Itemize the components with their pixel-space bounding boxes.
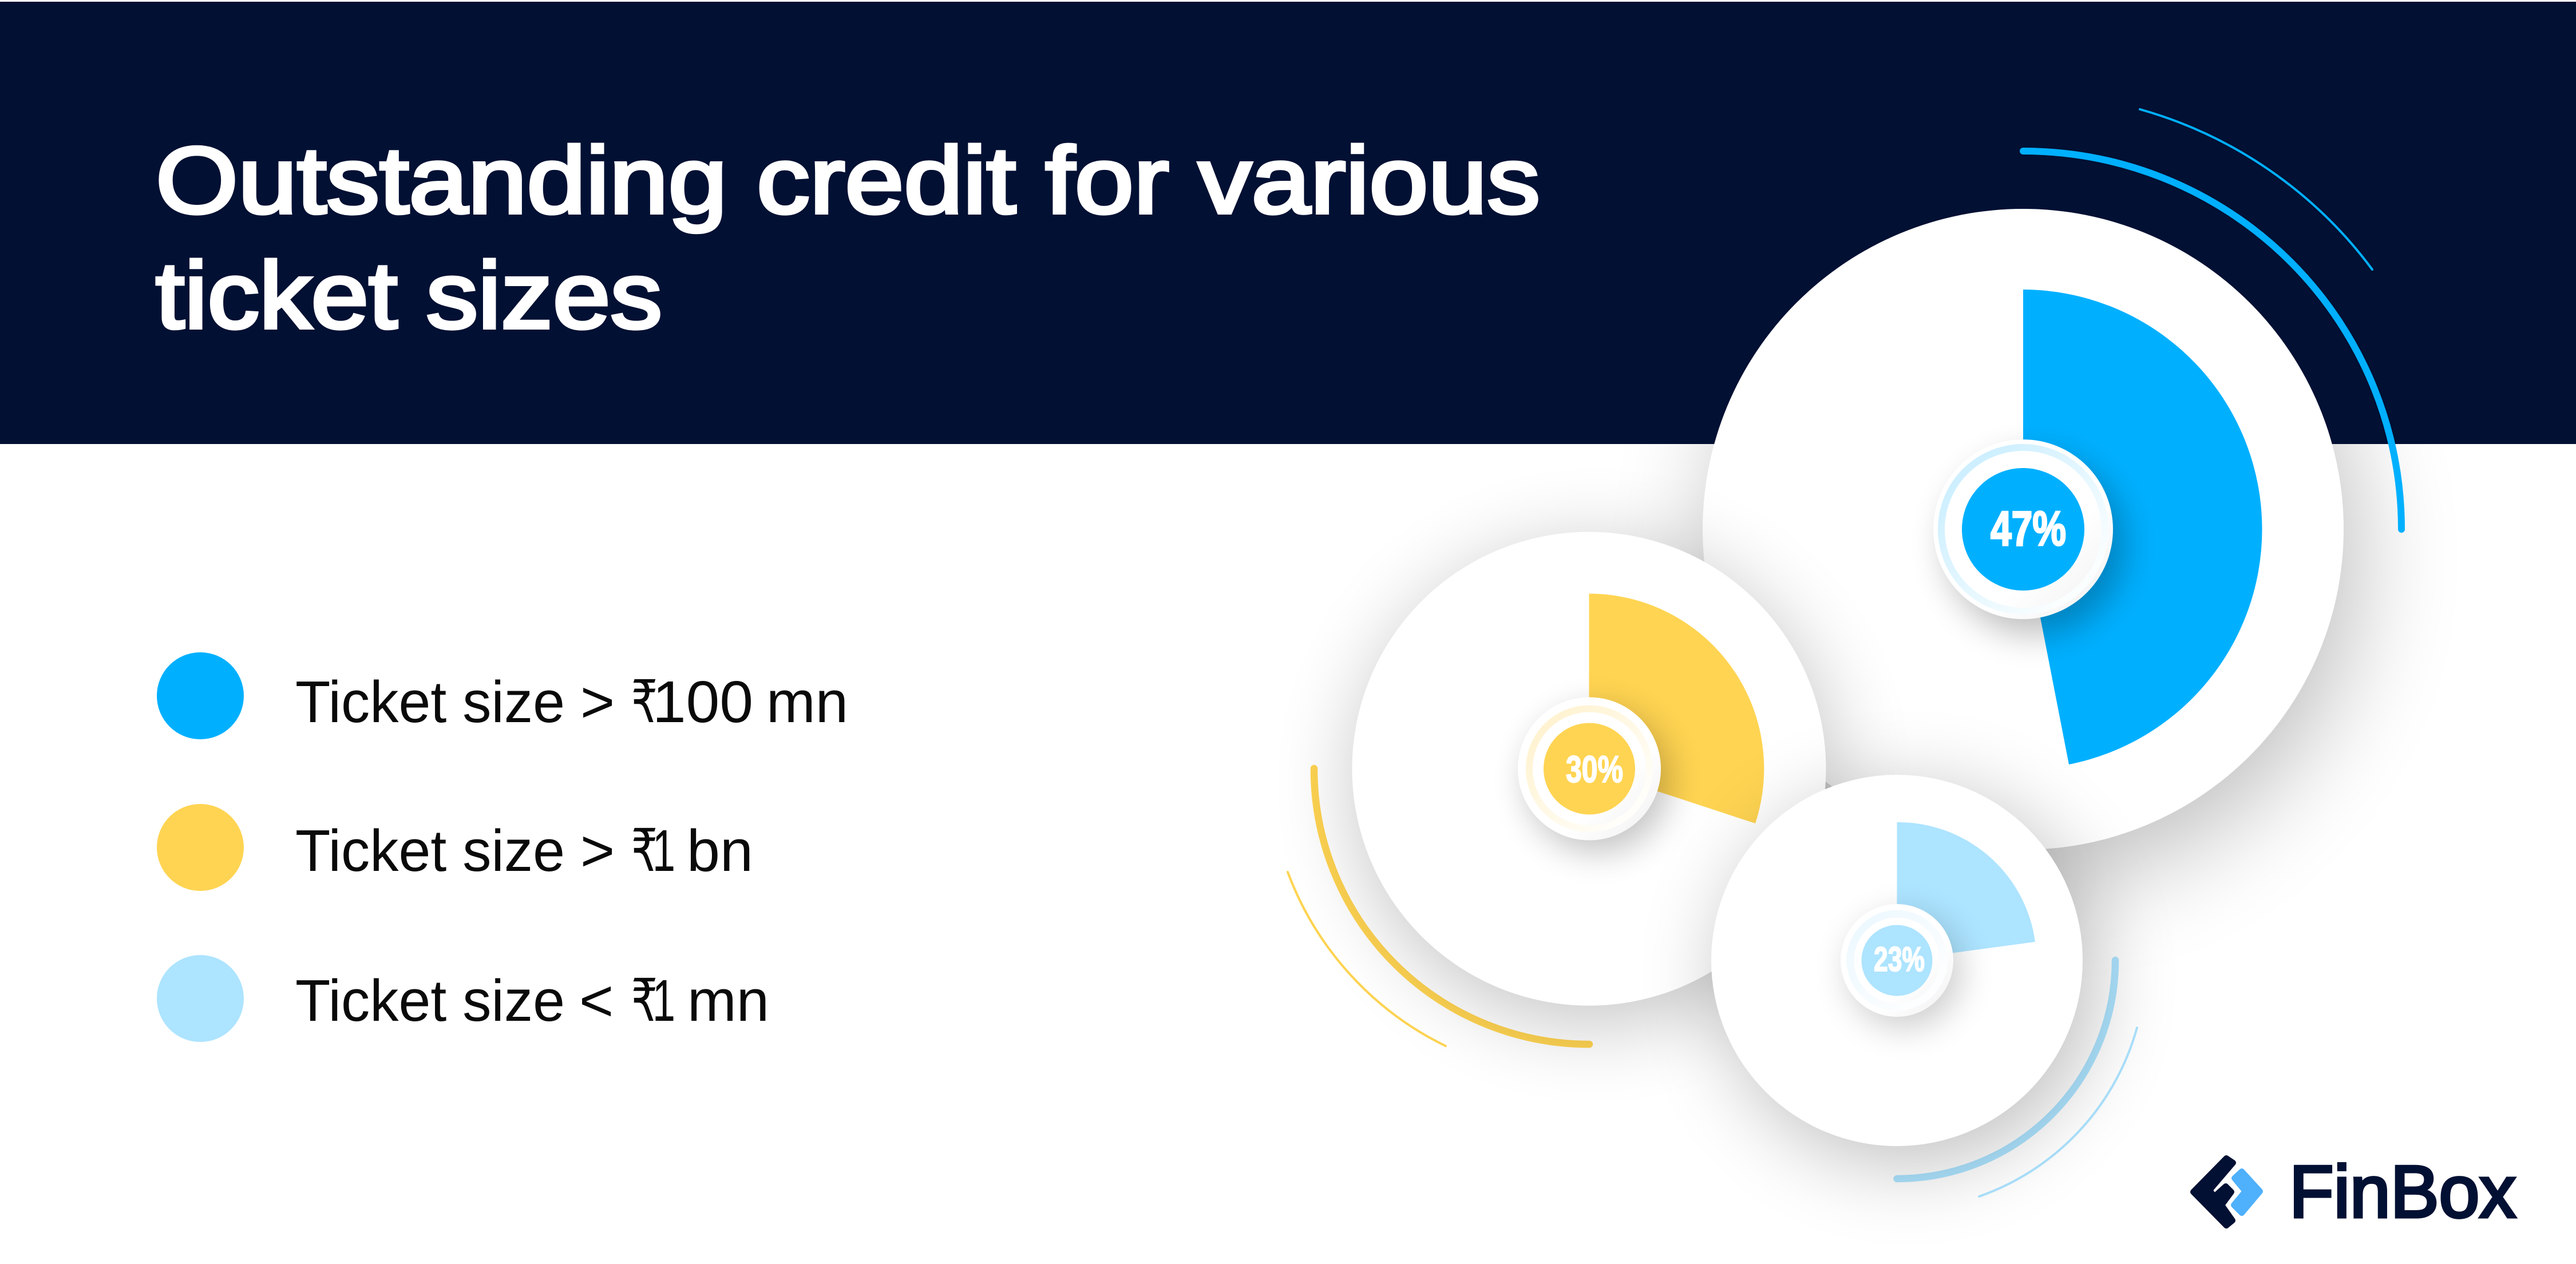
legend item: ticket size above 1 bn: > bbox=[580, 818, 615, 883]
center badge: 30%: 30% bbox=[1566, 748, 1623, 790]
outer arcs: blue bbox=[2023, 109, 2401, 529]
title: Outstanding credit for various bbox=[156, 128, 1540, 233]
legend item: ticket size below 1 mn: 1 bbox=[652, 968, 675, 1033]
legend bbox=[157, 652, 848, 1042]
disc: large white circle bbox=[1703, 209, 2344, 850]
legend item: ticket size above 1 bn: Ticket size bbox=[295, 818, 565, 883]
center badge: 30% bbox=[1518, 697, 1669, 852]
legend item: ticket size below 1 mn: Ticket size bbox=[295, 968, 565, 1033]
legend item: ticket size below 1 mn: < bbox=[579, 968, 614, 1033]
shadow: small circle bbox=[1723, 792, 2094, 1163]
legend item: ticket size above 100 mn: Ticket size bbox=[295, 669, 565, 735]
logo wordmark: FinBox bbox=[2289, 1151, 2516, 1233]
shadow: large circle bbox=[1714, 237, 2355, 878]
chart: 30 percent bbox=[1288, 532, 1831, 1046]
legend item: ticket size below 1 mn: ₹ bbox=[631, 968, 658, 1033]
legend item: ticket size below 1 mn: mn bbox=[687, 968, 769, 1033]
legend item: ticket size above 1 bn: 1 bbox=[652, 818, 675, 883]
outer arcs: light blue bbox=[1897, 960, 2137, 1196]
legend item: ticket size above 1 bn: ₹ bbox=[631, 818, 658, 883]
legend item: ticket size below 1 mn bbox=[157, 955, 769, 1042]
title bbox=[156, 128, 1540, 348]
legend item: ticket size above 100 mn bbox=[157, 652, 848, 739]
chart: 47 percent bbox=[1703, 109, 2401, 850]
legend item: ticket size above 100 mn: > bbox=[580, 669, 615, 735]
wedge: 23 percent bbox=[1897, 822, 2035, 960]
legend item: ticket size above 100 mn: ₹ bbox=[631, 669, 658, 735]
logo: FinBox bbox=[2193, 1151, 2516, 1233]
center badge: 47%: 47% bbox=[1991, 502, 2066, 556]
wedge: 30 percent bbox=[1589, 594, 1764, 823]
legend item: ticket size above 100 mn: 100 bbox=[652, 669, 753, 735]
center badge: 47% bbox=[1933, 439, 2125, 635]
legend item: ticket size above 100 mn: mn bbox=[766, 669, 848, 735]
disc: small white circle bbox=[1711, 775, 2083, 1146]
outer arcs: yellow bbox=[1288, 768, 1589, 1046]
legend item: ticket size above 1 bn bbox=[157, 804, 753, 891]
chart: 23 percent bbox=[1711, 775, 2137, 1196]
center badge: 23%: 23% bbox=[1874, 940, 1925, 978]
logo icon bbox=[2193, 1158, 2260, 1226]
wedge: 47 percent bbox=[2023, 290, 2262, 764]
center badge: 23% bbox=[1841, 904, 1961, 1028]
title: ticket sizes bbox=[156, 243, 662, 348]
disc: mid white circle bbox=[1352, 532, 1826, 1006]
shadow: mid circle bbox=[1358, 548, 1831, 1022]
legend item: ticket size above 1 bn: bn bbox=[687, 818, 753, 883]
header band bbox=[0, 2, 2576, 444]
